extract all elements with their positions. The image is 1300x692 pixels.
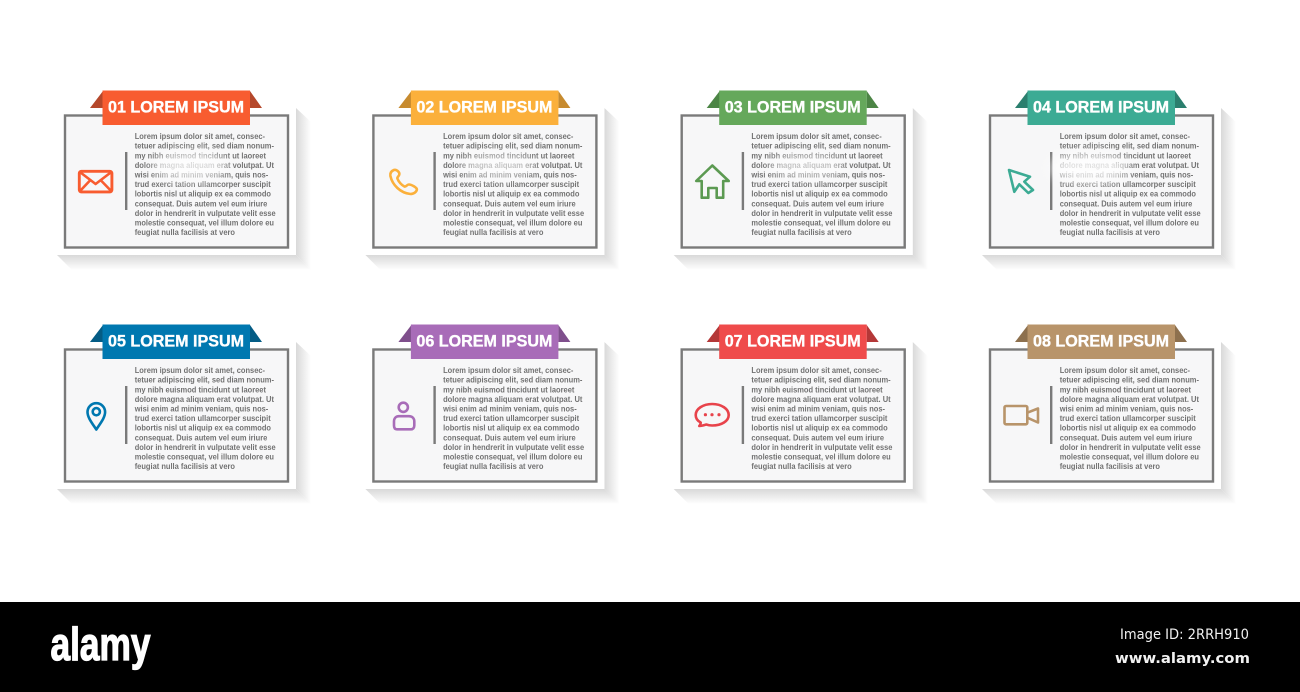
panel: card 03 (674, 90, 928, 270)
text block: lobortis nisl ut aliquip ex ea commodo (751, 190, 888, 199)
text block: consequat. Duis autem vel eum iriure (443, 199, 576, 208)
text block: consequat. Duis autem vel eum iriure (1060, 433, 1193, 442)
text block: tetuer adipiscing elit, sed diam nonum- (135, 376, 274, 385)
card paper (57, 108, 296, 255)
text block: Lorem ipsum dolor sit amet, consec- (751, 366, 882, 375)
text block: Lorem ipsum dolor sit amet, consec- (1060, 366, 1190, 375)
divider (433, 386, 436, 444)
card frame (682, 116, 905, 248)
text block: consequat. Duis autem vel eum iriure (135, 433, 268, 442)
text block: feugiat nulla facilisis at vero (1060, 228, 1160, 237)
text block: molestie consequat, vel illum dolore eu (751, 452, 891, 461)
heading: 03 LOREM IPSUM (725, 98, 861, 116)
text block: my nibh euismod tincidunt ut laoreet (443, 385, 575, 394)
text block: dolor in hendrerit in vulputate velit esse (1060, 443, 1201, 452)
text block: my nibh euismod tincidunt ut laoreet (135, 385, 266, 394)
text block: Lorem ipsum dolor sit amet, consec- (443, 366, 574, 375)
text block: tetuer adipiscing elit, sed diam nonum- (443, 142, 583, 151)
text block: dolore magna aliquam erat volutpat. Ut (135, 161, 274, 170)
text block: tetuer adipiscing elit, sed diam nonum- (751, 142, 891, 151)
text block (134, 132, 276, 237)
card frame (65, 116, 288, 248)
text block: consequat. Duis autem vel eum iriure (1060, 199, 1193, 208)
text block: dolor in hendrerit in vulputate velit esse (751, 209, 893, 218)
card paper (674, 108, 913, 255)
text block: Lorem ipsum dolor sit amet, consec- (443, 132, 574, 141)
text block: trud exerci tation ullamcorper suscipit (751, 414, 888, 423)
icon: video camera (1004, 406, 1038, 424)
text block: consequat. Duis autem vel eum iriure (751, 199, 884, 208)
text block: my nibh euismod tincidunt ut laoreet (751, 385, 883, 394)
text block: wisi enim ad minim veniam, quis nos- (750, 170, 885, 179)
heading: 08 LOREM IPSUM (1033, 332, 1169, 350)
text block: feugiat nulla facilisis at vero (135, 228, 235, 237)
text block: molestie consequat, vel illum dolore eu (1060, 452, 1199, 461)
text block: wisi enim ad minim veniam, quis nos- (750, 404, 885, 413)
card shadow (57, 342, 311, 504)
text block (1059, 132, 1201, 237)
text block (750, 366, 893, 471)
card shadow (674, 108, 928, 270)
text block: consequat. Duis autem vel eum iriure (443, 433, 576, 442)
card shadow (982, 342, 1236, 504)
heading: 02 LOREM IPSUM (416, 98, 552, 116)
text block: feugiat nulla facilisis at vero (1060, 462, 1160, 471)
text block: trud exerci tation ullamcorper suscipit (443, 180, 579, 189)
text block: wisi enim ad minim veniam, quis nos- (1059, 404, 1194, 413)
text block: dolore magna aliquam erat volutpat. Ut (1060, 395, 1199, 404)
footer bar (0, 602, 1300, 692)
text block: dolore magna aliquam erat volutpat. Ut (443, 395, 583, 404)
text block: dolor in hendrerit in vulputate velit esse (751, 443, 893, 452)
text block: my nibh euismod tincidunt ut laoreet (751, 151, 883, 160)
text block: my nibh euismod tincidunt ut laoreet (1060, 385, 1191, 394)
card paper (365, 108, 604, 255)
heading: 01 LOREM IPSUM (108, 98, 244, 116)
ribbon (90, 324, 262, 359)
ribbon (707, 90, 879, 125)
text block: my nibh euismod tincidunt ut laoreet (443, 151, 575, 160)
heading: 07 LOREM IPSUM (725, 332, 861, 350)
text block: tetuer adipiscing elit, sed diam nonum- (1060, 376, 1199, 385)
text block: lobortis nisl ut aliquip ex ea commodo (135, 190, 271, 199)
ribbon (1015, 324, 1187, 359)
heading: 04 LOREM IPSUM (1033, 98, 1169, 116)
text block: molestie consequat, vel illum dolore eu (135, 452, 274, 461)
card shadow (365, 108, 619, 270)
heading: 06 LOREM IPSUM (416, 332, 552, 350)
text block: dolore magna aliquam erat volutpat. Ut (751, 395, 891, 404)
image id: Image ID: 2RRH910 (1120, 627, 1249, 643)
text block (442, 366, 585, 471)
text block: feugiat nulla facilisis at vero (443, 228, 543, 237)
text block: dolore magna aliquam erat volutpat. Ut (443, 161, 583, 170)
icon: envelope (79, 171, 112, 192)
divider (125, 152, 127, 210)
ribbon (1015, 90, 1187, 125)
divider (125, 386, 127, 444)
icon: phone (390, 170, 417, 194)
text block: trud exerci tation ullamcorper suscipit (751, 180, 888, 189)
text block: tetuer adipiscing elit, sed diam nonum- (135, 142, 274, 151)
text block: trud exerci tation ullamcorper suscipit (135, 180, 271, 189)
divider (1050, 386, 1052, 444)
text block: lobortis nisl ut aliquip ex ea commodo (443, 190, 579, 199)
panel: card 02 (365, 90, 619, 270)
text block: lobortis nisl ut aliquip ex ea commodo (751, 424, 888, 433)
text block: molestie consequat, vel illum dolore eu (1060, 218, 1199, 227)
text block: dolore magna aliquam erat volutpat. Ut (135, 395, 274, 404)
ribbon (398, 90, 570, 125)
card frame (990, 116, 1213, 248)
card frame (682, 350, 905, 482)
text block: dolor in hendrerit in vulputate velit esse (443, 209, 585, 218)
icon: cursor (1009, 170, 1033, 193)
text block: trud exerci tation ullamcorper suscipit (135, 414, 271, 423)
icon: chat bubble (696, 404, 729, 426)
card paper (982, 342, 1221, 489)
card shadow (674, 342, 928, 504)
divider (742, 386, 744, 444)
text block: Lorem ipsum dolor sit amet, consec- (135, 366, 265, 375)
panel: card 04 (982, 90, 1236, 270)
card frame (373, 116, 596, 248)
text block: feugiat nulla facilisis at vero (443, 462, 543, 471)
card paper (674, 342, 913, 489)
text block: feugiat nulla facilisis at vero (751, 462, 852, 471)
text block: wisi enim ad minim veniam, quis nos- (1059, 170, 1194, 179)
text block: dolor in hendrerit in vulputate velit esse (443, 443, 585, 452)
panel: card 05 (57, 324, 311, 504)
card shadow (365, 342, 619, 504)
text block: Lorem ipsum dolor sit amet, consec- (135, 132, 265, 141)
card frame (990, 350, 1213, 482)
divider (433, 152, 436, 210)
text block: molestie consequat, vel illum dolore eu (443, 452, 582, 461)
text block: dolore magna aliquam erat volutpat. Ut (1060, 161, 1199, 170)
text block: dolor in hendrerit in vulputate velit esse (1060, 209, 1201, 218)
text block: lobortis nisl ut aliquip ex ea commodo (135, 424, 271, 433)
text block (750, 132, 893, 237)
text block: tetuer adipiscing elit, sed diam nonum- (1060, 142, 1199, 151)
text block (1059, 366, 1201, 471)
icon: house (696, 166, 729, 198)
icon: person (394, 403, 414, 429)
text block: molestie consequat, vel illum dolore eu (751, 218, 891, 227)
text block: consequat. Duis autem vel eum iriure (751, 433, 884, 442)
text block: lobortis nisl ut aliquip ex ea commodo (1060, 424, 1196, 433)
text block: trud exerci tation ullamcorper suscipit (443, 414, 579, 423)
text block: wisi enim ad minim veniam, quis nos- (442, 170, 577, 179)
divider (742, 152, 744, 210)
text block: wisi enim ad minim veniam, quis nos- (134, 404, 269, 413)
logo: alamy: alamy (50, 618, 151, 670)
text block: my nibh euismod tincidunt ut laoreet (135, 151, 266, 160)
text block: my nibh euismod tincidunt ut laoreet (1060, 151, 1191, 160)
card shadow (982, 108, 1236, 270)
text block: dolor in hendrerit in vulputate velit esse (135, 443, 276, 452)
card frame (373, 350, 596, 482)
text block: molestie consequat, vel illum dolore eu (135, 218, 274, 227)
card shadow (57, 108, 311, 270)
text block: consequat. Duis autem vel eum iriure (135, 199, 268, 208)
text block (134, 366, 276, 471)
text block: tetuer adipiscing elit, sed diam nonum- (751, 376, 891, 385)
panel: card 07 (674, 324, 928, 504)
text block: dolore magna aliquam erat volutpat. Ut (751, 161, 891, 170)
card paper (982, 108, 1221, 255)
card frame (65, 350, 288, 482)
ribbon (398, 324, 570, 359)
text block: feugiat nulla facilisis at vero (135, 462, 235, 471)
text block: wisi enim ad minim veniam, quis nos- (442, 404, 577, 413)
heading: 05 LOREM IPSUM (108, 332, 244, 350)
card paper (365, 342, 604, 489)
text block: molestie consequat, vel illum dolore eu (443, 218, 582, 227)
text block: wisi enim ad minim veniam, quis nos- (134, 170, 269, 179)
panel: card 08 (982, 324, 1236, 504)
ribbon (90, 90, 262, 125)
text block: feugiat nulla facilisis at vero (751, 228, 852, 237)
text block: trud exerci tation ullamcorper suscipit (1060, 414, 1196, 423)
ribbon (707, 324, 879, 359)
panel: card 06 (365, 324, 619, 504)
text block: Lorem ipsum dolor sit amet, consec- (1060, 132, 1190, 141)
divider (1050, 152, 1052, 210)
text block (442, 132, 585, 237)
card paper (57, 342, 296, 489)
text block: lobortis nisl ut aliquip ex ea commodo (1060, 190, 1196, 199)
panel: card 01 (57, 90, 311, 270)
text block: trud exerci tation ullamcorper suscipit (1060, 180, 1196, 189)
website: www.alamy.com (1115, 651, 1250, 667)
text block: lobortis nisl ut aliquip ex ea commodo (443, 424, 579, 433)
text block: Lorem ipsum dolor sit amet, consec- (751, 132, 882, 141)
text block: tetuer adipiscing elit, sed diam nonum- (443, 376, 583, 385)
text block: dolor in hendrerit in vulputate velit esse (135, 209, 276, 218)
icon: location pin (88, 403, 105, 430)
